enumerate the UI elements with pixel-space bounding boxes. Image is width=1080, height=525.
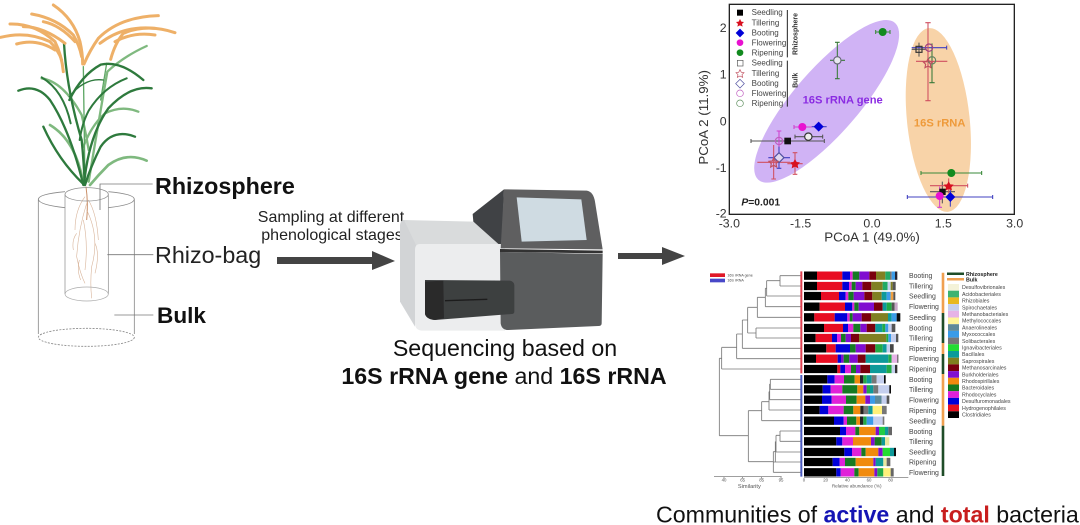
similarity axis text: 95	[779, 478, 784, 483]
sample labels: Flowering	[909, 304, 939, 311]
sample labels: Seedling	[909, 315, 936, 322]
habitat colour strip	[942, 273, 944, 476]
similarity axis text: 40	[845, 478, 850, 483]
chart: PCoA scatter	[696, 2, 1023, 244]
axis ticks: 1.5	[935, 216, 952, 230]
pot base	[38, 328, 134, 346]
scatter markers	[769, 28, 955, 202]
stacked bars	[804, 276, 900, 472]
label: Rhizosphere: Rhizosphere	[155, 173, 295, 199]
plot frame	[729, 4, 1014, 214]
similarity axis text: 85	[759, 478, 765, 483]
label: 16S rRNA gene: 16S rRNA gene	[803, 95, 883, 107]
bar: row 13	[804, 387, 889, 412]
rice panicles	[1, 5, 175, 72]
legend: habitat: Rhizosphere	[966, 272, 998, 278]
sample labels: Booting	[909, 325, 933, 332]
order legend: Rhizobiales	[962, 299, 990, 305]
sample labels: Ripening	[909, 408, 936, 415]
dark body	[500, 252, 603, 330]
similarity axis text	[722, 478, 894, 490]
bar: row 7	[804, 325, 898, 350]
scatter legend	[736, 8, 800, 108]
bar: row 16	[804, 418, 892, 443]
bar: row 12	[804, 377, 891, 402]
left colour strip	[798, 271, 804, 373]
scatter legend: Booting	[752, 28, 779, 37]
sample labels: Tillering	[909, 387, 933, 394]
label: P value: P=0.001	[741, 197, 780, 208]
similarity axis text: Similarity	[738, 484, 761, 490]
order legend: Rhodocyclales	[962, 392, 997, 398]
legend: habitat: Bulk	[966, 278, 978, 284]
roots	[73, 187, 98, 298]
bar: row 11	[804, 367, 886, 392]
outer cylinder	[38, 192, 134, 334]
light body	[400, 220, 503, 248]
bar: row 18	[804, 439, 896, 464]
similarity axis text: 40	[722, 478, 727, 483]
axis ticks: 1	[720, 68, 727, 82]
mini legend: gene vs rRNA: 16S rRNA gene	[727, 273, 753, 277]
order legend: Burkholderiales	[962, 372, 999, 378]
leader lines	[100, 184, 153, 315]
text: sampling note: phenological stages	[261, 227, 403, 244]
sample labels: Seedling	[909, 450, 936, 456]
axis ticks: 0	[720, 114, 727, 128]
scatter legend: Booting	[752, 79, 779, 88]
purple ellipse	[734, 2, 919, 201]
y axis title: PCoA 2 (11.9%)	[696, 70, 711, 165]
bar: row 1	[804, 263, 897, 288]
diagram: rhizo-bag pot	[38, 184, 153, 346]
axis ticks: 2	[720, 21, 727, 35]
bar: row 10	[804, 356, 897, 381]
dendrogram	[719, 276, 801, 472]
axis ticks: -3.0	[719, 216, 740, 230]
similarity axis text: 0	[803, 478, 806, 483]
sample labels: Flowering	[909, 398, 939, 404]
dendrogram axis	[714, 477, 908, 479]
text: sequencing caption: 16S rRNA gene and 16S rRNA	[341, 363, 667, 389]
order legend	[947, 272, 1011, 418]
order legend: Bacillales	[962, 352, 985, 358]
legend: habitat	[947, 272, 998, 284]
bar: row 6	[804, 315, 895, 340]
sample labels: Ripening	[909, 346, 936, 353]
bar: row 4	[804, 294, 898, 319]
similarity axis text: 65	[740, 478, 746, 483]
order legend: Hydrogenophilales	[962, 406, 1006, 412]
icon: sequencer machine	[400, 189, 603, 331]
scatter legend: Tillering	[752, 18, 779, 27]
order legend: Anaerolineales	[962, 325, 997, 331]
error bars	[751, 23, 993, 207]
text: sampling note: Sampling at different	[258, 209, 405, 226]
sample labels: Seedling	[909, 294, 936, 301]
sample labels: Flowering	[909, 470, 939, 477]
mini legend: gene vs rRNA	[710, 273, 753, 283]
screen	[517, 197, 587, 242]
order legend: Myxococcales	[962, 332, 996, 338]
bar: row 5	[804, 305, 900, 330]
mini legend: gene vs rRNA: 16S rRNA	[727, 279, 744, 283]
order legend: Methanobacteriales	[962, 312, 1009, 318]
sample labels: Tillering	[909, 283, 933, 290]
scatter legend: Ripening	[752, 49, 783, 58]
sample labels: Ripening	[909, 366, 936, 374]
axis ticks: -1.5	[790, 216, 811, 230]
bar: row 17	[804, 429, 889, 454]
similarity axis text: Relative abundance (%)	[832, 483, 882, 488]
sample labels: Booting	[909, 429, 933, 436]
head	[501, 189, 603, 249]
sample labels: Ripening	[909, 460, 936, 466]
scatter legend: Bulk	[793, 73, 800, 88]
order legend: Ignavibacteriales	[962, 346, 1002, 352]
scatter legend: Flowering	[752, 89, 786, 98]
inner rhizo-bag	[65, 188, 108, 301]
similarity axis text: 60	[867, 478, 872, 483]
scatter legend: Seedling	[752, 59, 783, 68]
order legend: Desulfuromonadales	[962, 399, 1011, 405]
axis ticks	[716, 21, 1023, 230]
similarity axis text: 20	[823, 478, 829, 483]
sample labels: Booting	[909, 273, 933, 280]
scatter legend: Tillering	[752, 69, 779, 78]
axis ticks: -2	[716, 206, 727, 220]
sample labels	[909, 273, 939, 477]
order legend: Saprospirales	[962, 359, 995, 365]
bar: row 9	[804, 346, 898, 371]
label: Rhizo-bag: Rhizo-bag	[155, 242, 261, 268]
bar: row 3	[804, 283, 895, 308]
order legend: Desulfovibrionales	[962, 285, 1006, 291]
sample labels: Flowering	[909, 356, 939, 363]
order legend: Rhodospirillales	[962, 379, 1000, 385]
plant leaves	[18, 43, 152, 185]
x axis title: PCoA 1 (49.0%)	[824, 229, 920, 244]
scatter legend: Flowering	[752, 38, 786, 47]
order legend: Methanosarcinales	[962, 366, 1007, 372]
icon: rice plant	[1, 5, 175, 185]
similarity axis text: 80	[888, 478, 894, 483]
chart: dendrogram and stacked bars	[710, 271, 908, 490]
scatter legend: Ripening	[752, 99, 783, 108]
arrow: to results	[618, 247, 685, 265]
sample labels: Tillering	[909, 336, 933, 343]
drawer	[425, 280, 514, 320]
sample labels: Booting	[909, 377, 933, 384]
sample labels: Seedling	[909, 418, 936, 425]
wedge	[473, 189, 504, 249]
orange ellipse	[898, 25, 979, 215]
arrow: to sequencer	[277, 251, 395, 270]
bar: row 14	[804, 397, 887, 422]
bar: row 19	[804, 449, 890, 474]
order legend: Clostridiales	[962, 412, 991, 418]
order legend: Spirochaetales	[962, 305, 997, 311]
bar: row 2	[804, 273, 896, 298]
bar: row 8	[804, 336, 894, 361]
axis ticks: 3.0	[1006, 216, 1023, 230]
label: Bulk: Bulk	[157, 303, 206, 328]
bar: row 15	[804, 408, 884, 433]
order legend: Solibacterales	[962, 339, 996, 345]
axis ticks: 0.0	[863, 216, 881, 230]
scatter legend: Rhizosphere	[793, 13, 800, 55]
order legend: Bacteroidales	[962, 386, 994, 392]
text: sequencing caption: Sequencing based on	[393, 335, 617, 361]
bar: row 20	[804, 460, 894, 485]
order legend: Acidobacteriales	[962, 292, 1001, 298]
sample labels: Tillering	[909, 439, 933, 446]
label: 16S rRNA: 16S rRNA	[914, 118, 965, 130]
scatter legend: Seedling	[752, 8, 783, 17]
axis ticks: -1	[716, 161, 727, 175]
order legend: Methylococcales	[962, 319, 1002, 325]
